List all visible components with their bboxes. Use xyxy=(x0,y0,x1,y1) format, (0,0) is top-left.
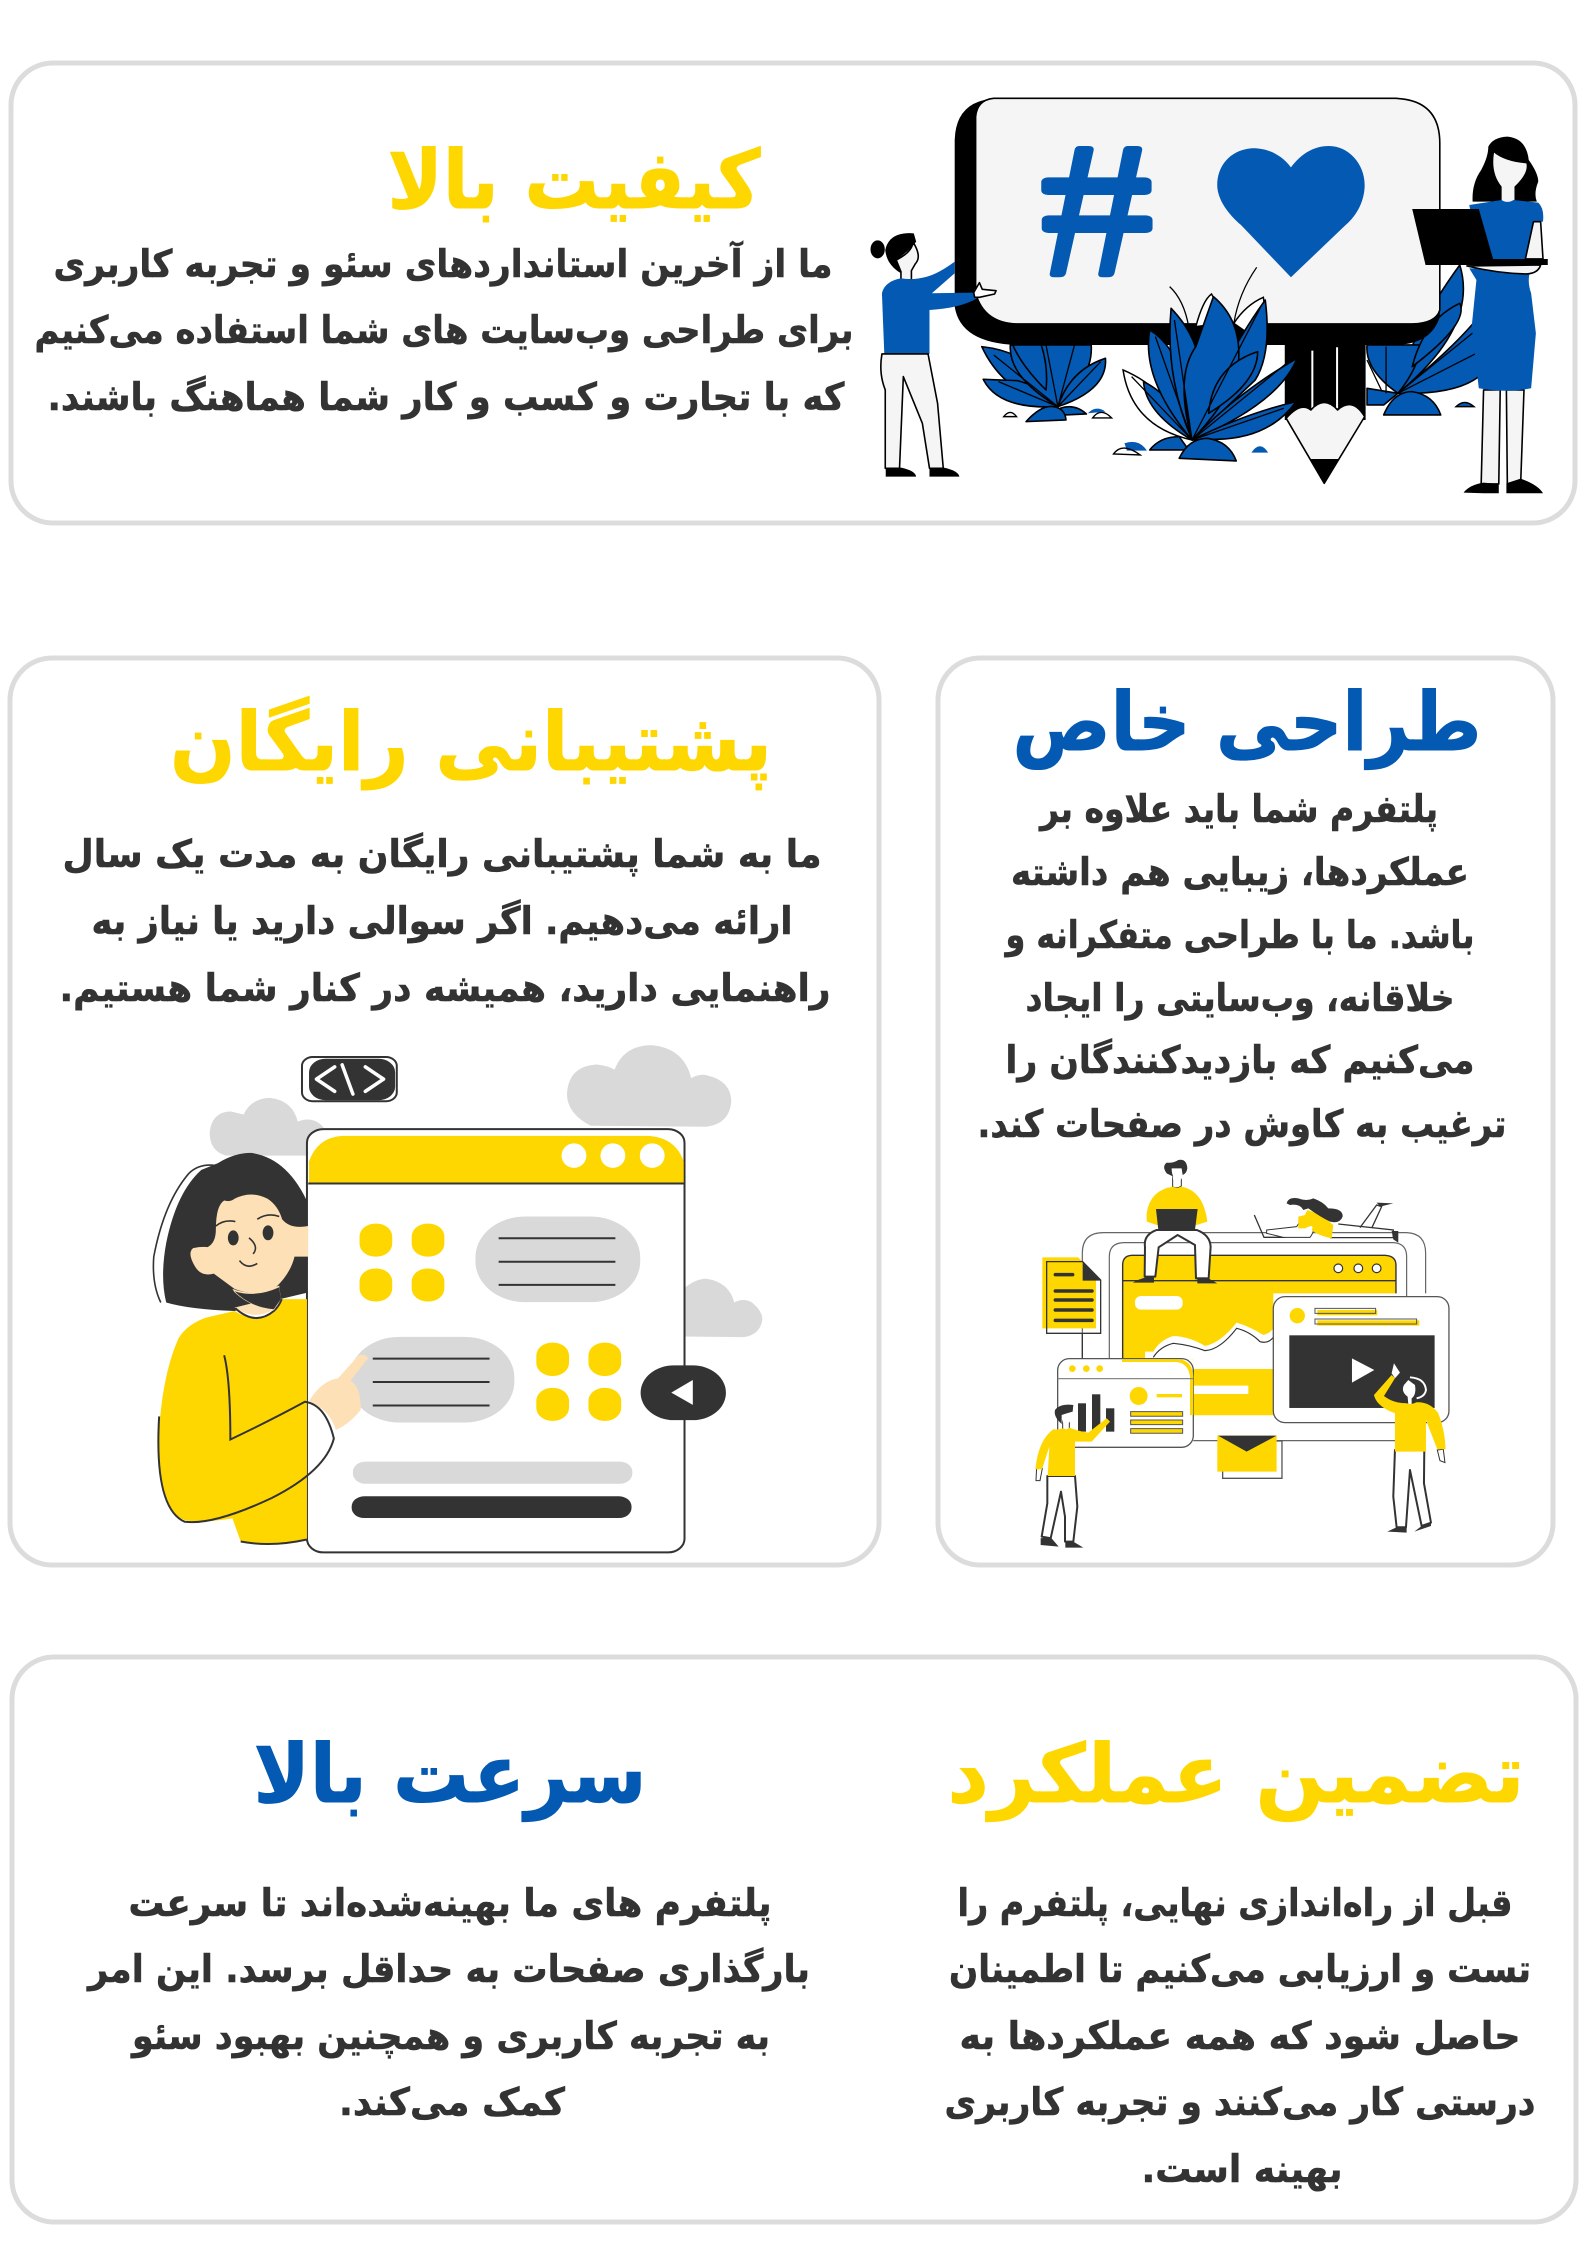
card border xyxy=(938,658,1553,1565)
dashboard card xyxy=(1058,1359,1193,1447)
heading: free support: پشتیبانی رایگان xyxy=(170,696,772,790)
speech block top xyxy=(475,1216,640,1302)
text block: special design description: عملکردها، زیبایی هم داشته xyxy=(1011,850,1469,895)
video card xyxy=(1273,1297,1449,1423)
text block: free support description: ما به شما پشتیبانی رایگان به مدت یک سال xyxy=(62,832,822,876)
text block: special design description: ترغیب به کاوش در صفحات کند. xyxy=(978,1102,1506,1147)
figure: man pointing at chart xyxy=(1035,1405,1110,1548)
figure: woman touching board xyxy=(871,233,996,477)
icon: code badge xyxy=(302,1057,397,1101)
text block: high quality description xyxy=(34,240,854,420)
speech block bottom xyxy=(350,1337,514,1423)
hair outline xyxy=(153,1165,216,1302)
text block: guaranteed performance description: درستی کار می‌کنند و تجربه کاربری xyxy=(944,2080,1536,2125)
panel: free support xyxy=(10,658,879,1565)
heading: guaranteed performance: تضمین عملکرد xyxy=(948,1728,1524,1822)
board screen xyxy=(976,98,1440,324)
illustration: woman with browser window xyxy=(153,1045,762,1552)
card border xyxy=(10,658,879,1565)
dots grid top xyxy=(360,1224,444,1301)
plant: center xyxy=(1114,267,1297,461)
text block: high quality description: که با تجارت و کسب و کار شما هماهنگ باشند. xyxy=(48,375,845,420)
text block: free support description xyxy=(60,832,830,1011)
figure: man sitting with laptop xyxy=(1133,1160,1217,1283)
panel: performance and speed xyxy=(12,1657,1576,2222)
browser window xyxy=(307,1129,685,1552)
text block: special design description xyxy=(978,787,1506,1147)
illustration: team around website xyxy=(1035,1160,1449,1548)
text block: special design description: خلاقانه، وب‌سایتی را ایجاد xyxy=(1026,976,1454,1021)
figure: woman with laptop xyxy=(1412,137,1548,493)
text block: special design description: می‌کنیم که بازدیدکنندگان را xyxy=(1006,1038,1474,1083)
pencil xyxy=(1285,343,1366,483)
text block: high quality description: برای طراحی وب‌سایت های شما استفاده می‌کنیم xyxy=(34,308,854,353)
heading: special design: طراحی خاص xyxy=(1012,676,1482,770)
panel: high quality xyxy=(11,63,1575,523)
card border xyxy=(11,63,1575,523)
monitor frames xyxy=(1082,1233,1426,1441)
text block: guaranteed performance description: بهینه است. xyxy=(1142,2147,1342,2191)
text block: high speed description: بارگذاری صفحات به حداقل برسد. این امر xyxy=(86,1947,810,1991)
board frame xyxy=(955,98,1440,345)
plant: left xyxy=(982,345,1112,422)
content bars xyxy=(352,1462,632,1518)
plant: right xyxy=(1367,265,1479,415)
text block: high quality description: ما از آخرین استانداردهای سئو و تجربه کاربری xyxy=(54,240,832,287)
text block: special design description: باشد. ما با طراحی متفکرانه و xyxy=(1004,913,1474,958)
clouds xyxy=(210,1045,762,1337)
card border xyxy=(12,1657,1576,2222)
figure: woman body xyxy=(158,1299,368,1544)
website screen xyxy=(1122,1255,1396,1415)
figure: woman face xyxy=(190,1195,308,1310)
heading: high quality: کیفیت بالا xyxy=(388,134,761,228)
text block: guaranteed performance description xyxy=(944,1881,1536,2191)
text block: free support description: ارائه می‌دهیم. اگر سوالی دارید یا نیاز به xyxy=(92,899,792,944)
text block: high speed description xyxy=(86,1881,810,2124)
figure: woman hair xyxy=(163,1153,309,1311)
dots grid bottom xyxy=(536,1343,621,1421)
icon: document xyxy=(1042,1257,1101,1358)
icon: back button xyxy=(641,1365,726,1420)
icon: envelope xyxy=(1217,1436,1282,1478)
text block: high speed description: به تجربه کاربری و همچنین بهبود سئو xyxy=(130,2014,770,2059)
text block: special design description: پلتفرم شما باید علاوه بر xyxy=(1038,787,1438,832)
text block: free support description: راهنمایی دارید، همیشه در کنار شما هستیم. xyxy=(60,966,830,1011)
text block: guaranteed performance description: حاصل شود که همه عملکردها به xyxy=(960,2014,1520,2058)
panel: special design xyxy=(938,658,1553,1565)
figure: man touching video xyxy=(1374,1363,1446,1533)
text block: guaranteed performance description: قبل از راه‌اندازی نهایی، پلتفرم را xyxy=(958,1881,1512,1926)
text block: guaranteed performance description: تست و ارزیابی می‌کنیم تا اطمینان xyxy=(949,1947,1531,1992)
icon: heart xyxy=(1217,146,1365,277)
figure: woman lying with laptop xyxy=(1254,1198,1398,1243)
heading: high speed: سرعت بالا xyxy=(254,1728,646,1822)
icon: hashtag xyxy=(1041,146,1153,277)
text block: high speed description: کمک می‌کند. xyxy=(339,2080,566,2124)
illustration: board with hashtag and heart xyxy=(871,98,1548,493)
text block: high speed description: پلتفرم های ما بهینه‌شده‌اند تا سرعت xyxy=(128,1881,772,1926)
